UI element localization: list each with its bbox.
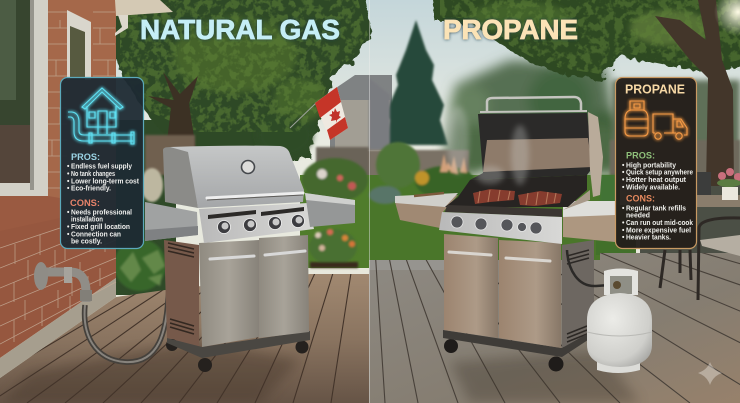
title: propane: PROPANE <box>443 14 578 45</box>
text: pros: • <box>67 186 70 193</box>
text: pros: Endless fuel supply <box>71 164 132 170</box>
house wall: small window <box>67 10 91 80</box>
background: left shade tree <box>100 0 372 158</box>
grill control panel <box>199 203 314 243</box>
text: cons: Can run out mid-cook <box>626 220 693 227</box>
text: pros: • <box>622 162 625 170</box>
text: pros: High portability <box>626 162 676 170</box>
grill doors <box>199 235 309 347</box>
panel: natural gas pros and cons <box>60 78 144 248</box>
deck: propane side <box>369 253 740 403</box>
propane grill <box>395 97 615 372</box>
background: fences <box>145 135 740 182</box>
text: pros: Widely available. <box>626 184 680 192</box>
grill lid <box>163 146 304 208</box>
watermark sparkle <box>698 362 722 385</box>
text: pros: • <box>622 177 625 184</box>
propane side body and vents <box>562 240 594 348</box>
propane open lid <box>470 97 603 210</box>
text: pros <box>622 150 693 192</box>
patio furniture <box>660 168 740 300</box>
text: cons: • <box>622 206 625 212</box>
grill side shelves <box>145 193 355 241</box>
text: pros: • <box>622 170 625 177</box>
text: pros: • <box>67 171 70 178</box>
propane base <box>443 330 594 357</box>
text: cons: • <box>622 234 625 242</box>
natural gas grill <box>145 146 355 372</box>
background: far house right <box>612 80 740 185</box>
text: cons: CONS: <box>626 194 655 204</box>
background: neighbouring house left <box>330 75 392 150</box>
text: pros: PROS: <box>71 152 100 163</box>
centre divider <box>369 0 370 403</box>
propane wheels <box>444 339 564 372</box>
text: cons: needed <box>626 213 650 220</box>
panel: propane pros and cons <box>616 78 696 248</box>
text: cons <box>622 194 693 242</box>
text: cons: Regular tank refills <box>626 206 686 212</box>
background: canadian flag <box>290 87 348 140</box>
deck: natural gas side <box>0 274 369 403</box>
propane tank <box>587 268 652 373</box>
propane side shelves <box>395 193 615 242</box>
background: patio backdrop <box>640 178 740 254</box>
grill base <box>167 331 310 358</box>
icon: house with gas pipe <box>68 88 134 144</box>
text: cons: • <box>622 227 625 234</box>
text: pros <box>67 152 140 193</box>
text: pros: No tank changes <box>71 171 115 178</box>
background: right side soft trees <box>442 60 625 175</box>
text: pros: Eco-friendly. <box>71 186 111 193</box>
propane doors <box>444 234 561 348</box>
background: right tree canopy <box>428 0 740 186</box>
text: cons: • <box>67 232 70 238</box>
house wall: brick <box>0 0 116 378</box>
background: foliage behind left grill <box>116 120 176 295</box>
text: cons: Needs professional <box>71 210 132 216</box>
icon: propane tank and truck <box>625 101 687 139</box>
text: pros: • <box>622 184 625 192</box>
gas pipe and hose from wall to grill <box>34 256 184 362</box>
background: lawns <box>300 175 636 268</box>
text: cons: Connection can <box>71 232 121 238</box>
house wall: large window <box>0 0 48 198</box>
text: cons: • <box>622 220 625 227</box>
propane smoke <box>447 106 529 185</box>
text: cons <box>67 198 132 246</box>
text: pros: Quick setup anywhere <box>626 170 693 177</box>
text: pros: Hotter heat output <box>626 177 687 184</box>
text: cons: installation <box>71 217 103 224</box>
propane firebox and steaks <box>445 175 587 207</box>
text: cons: Fixed grill location <box>71 224 130 231</box>
text: cons: • <box>67 224 70 231</box>
text: pros: Lower long-term cost <box>71 178 140 186</box>
background: garden bushes and flowers <box>114 142 616 291</box>
text: cons: • <box>67 210 70 216</box>
propane control panel <box>439 205 562 244</box>
text: cons: Heavier tanks. <box>626 234 671 242</box>
text: cons: be costly. <box>71 239 102 246</box>
text: cons: CONS: <box>70 198 100 209</box>
grill side body and vents <box>164 240 199 347</box>
house wall: brick sill <box>0 196 60 231</box>
background: house behind spruce <box>369 78 390 150</box>
text: pros: • <box>67 164 70 170</box>
background: spruce tree <box>384 20 448 145</box>
grill wheels <box>166 339 308 372</box>
propane hose <box>567 250 610 286</box>
text: pros: • <box>67 178 70 186</box>
heading: propane: PROPANE <box>625 82 685 96</box>
title: natural gas: NATURAL GAS <box>140 14 340 45</box>
text: pros: PROS: <box>626 150 655 162</box>
text: cons: More expensive fuel <box>626 227 691 234</box>
roof eave and downspout <box>115 0 173 36</box>
